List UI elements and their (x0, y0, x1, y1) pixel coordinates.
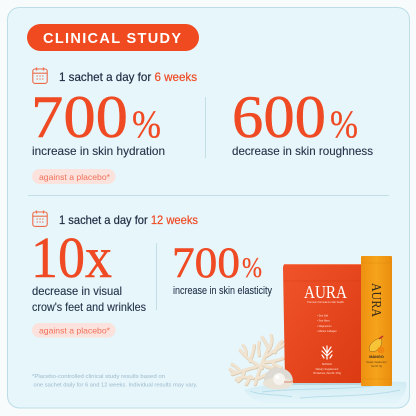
icon: calendar 6 weeks (33, 68, 47, 83)
footnote (32, 374, 198, 388)
product: orange pouch: Premium formula for skin health (307, 300, 344, 304)
stat: 700% elasticity: increase in skin elasticity (173, 285, 272, 297)
product: mango sachet: AURA (368, 283, 383, 318)
stat: 10x wrinkles: decrease in visual (32, 284, 122, 298)
product scene (230, 256, 406, 405)
stat: 600% roughness: 600 (232, 84, 326, 150)
product: orange pouch: Dietary Supplement (316, 367, 339, 371)
stat: 600% roughness: % (330, 103, 358, 146)
text: 6 week regimen: 1 sachet a day for 6 weeks (59, 70, 197, 84)
footnote: one sachet daily for 6 and 12 weeks. Individual results may vary. (34, 382, 198, 388)
stat: 700% elasticity: 700 (172, 240, 240, 287)
product: orange pouch: • Sea Moss (317, 320, 330, 322)
product: orange pouch: • Sea Salt (317, 314, 328, 318)
heading: clinical study pill: CLINICAL STUDY (43, 31, 181, 47)
product: mango sachet (361, 256, 392, 386)
badge: against a placebo (32, 169, 116, 184)
icon: coral (230, 335, 283, 385)
product: orange pouch (283, 264, 362, 383)
product: mango sachet: Net Wt. 9g (371, 365, 383, 368)
footnote: *Placebo-controlled clinical study results based on (32, 374, 165, 380)
stat: 700% hydration: % (132, 103, 161, 146)
stat: 700% hydration: increase in skin hydration (32, 144, 165, 158)
product: orange pouch: • Marine Collagen (317, 330, 337, 333)
stat: 10x wrinkles (31, 225, 146, 314)
product: orange pouch: • Magnesium (317, 325, 332, 328)
text: 12 week regimen: 1 sachet a day for 12 weeks (59, 213, 198, 227)
stat: 600% roughness (232, 84, 373, 158)
stat: 700% elasticity (172, 240, 272, 297)
stat: 700% elasticity: % (242, 253, 262, 284)
stat: 700% hydration (31, 84, 165, 158)
product: mango sachet: Dietary Supplement (366, 361, 387, 364)
product: orange pouch: 30 Sachets | Net Wt. 270g (313, 372, 342, 375)
icon: pearl shell (263, 368, 293, 390)
icon: calendar 12 weeks (33, 210, 47, 226)
badge: against a placebo (32, 323, 116, 338)
product: mango sachet: MANGO (369, 355, 384, 359)
stat: 700% hydration: 700 (31, 84, 128, 150)
water surface (244, 381, 406, 405)
badge: against a placebo: against a placebo* (39, 326, 111, 336)
badge: against a placebo: against a placebo* (39, 172, 111, 182)
product: orange pouch: AURA (304, 282, 347, 302)
stat: 10x wrinkles: 10x (31, 225, 112, 290)
heading: clinical study pill (27, 24, 199, 51)
stat: 10x wrinkles: crow's feet and wrinkles (32, 300, 146, 314)
product: orange pouch: MANGO (322, 362, 332, 366)
stat: 600% roughness: decrease in skin roughness (232, 144, 373, 158)
